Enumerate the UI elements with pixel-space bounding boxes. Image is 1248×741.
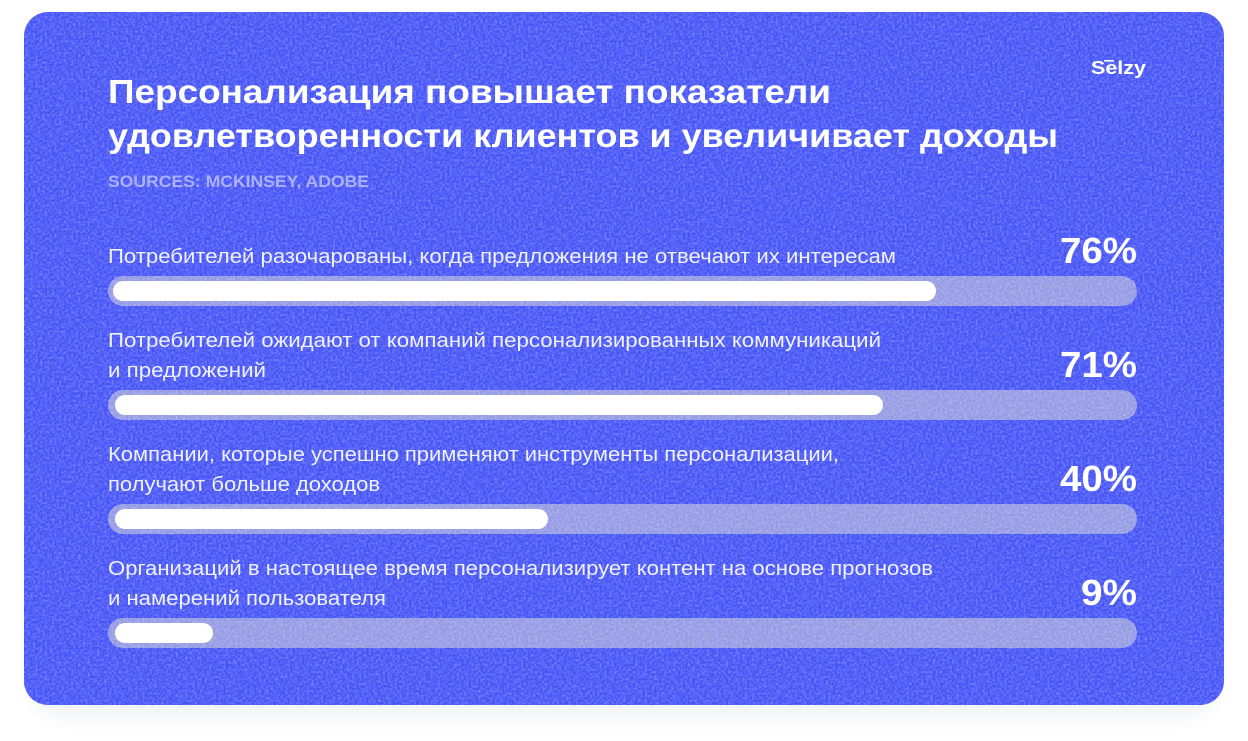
title: Персонализация повышает показатели (108, 73, 831, 110)
row 1 bar (108, 276, 1137, 306)
title: удовлетворенности клиентов и увеличивает доходы (108, 117, 1058, 154)
row 3 bar (108, 504, 1137, 534)
row 4 value: 9% (1081, 572, 1137, 613)
row 1: disappointed consumers (108, 230, 1137, 306)
row 3 label: Компании, которые успешно применяют инструменты персонализации, (108, 444, 839, 466)
row 1 value: 76% (1060, 230, 1137, 271)
logo: Selzy: Selzy (1091, 57, 1147, 78)
row 2 label: Потребителей ожидают от компаний персонализированных коммуникаций (108, 330, 881, 352)
row 4 bar (108, 618, 1137, 648)
row 4 label: Организаций в настоящее время персонализирует контент на основе прогнозов (108, 558, 933, 580)
row 2: expect personalization (108, 330, 1137, 420)
row 2 label: и предложений (108, 360, 266, 382)
row 2 bar (108, 390, 1137, 420)
row 2 value: 71% (1060, 344, 1137, 385)
sources note: SOURCES: MCKINSEY, ADOBE (108, 172, 369, 191)
row 3 value: 40% (1060, 458, 1137, 499)
row 1 label: Потребителей разочарованы, когда предложения не отвечают их интересам (108, 246, 896, 268)
row 3 label: получают больше доходов (108, 474, 380, 496)
row 4: predictive content (108, 558, 1137, 648)
row 3: companies earn more (108, 444, 1137, 534)
row 4 label: и намерений пользователя (108, 588, 386, 610)
title (108, 73, 1058, 154)
